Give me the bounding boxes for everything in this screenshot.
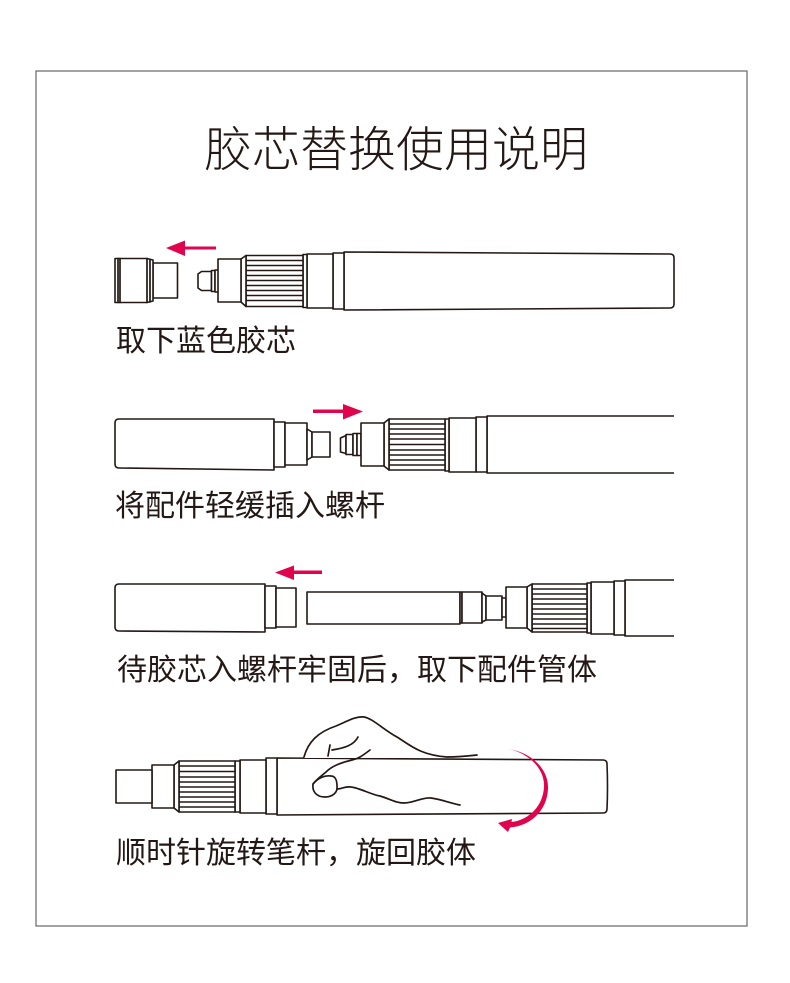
knurled grip: [389, 424, 445, 465]
hand: [304, 717, 477, 805]
step 1 label: 取下蓝色胶芯: [116, 325, 296, 358]
pen assembled: [116, 758, 608, 815]
knurled grip: [246, 260, 303, 300]
screw nozzle: [340, 434, 361, 456]
arrow: rotate clockwise: [498, 749, 548, 832]
knurled grip: [179, 766, 235, 807]
knurled grip: [532, 589, 587, 628]
cartridge: [307, 592, 506, 624]
fitting tube: [115, 584, 296, 632]
outer frame: [36, 71, 747, 926]
arrow: pull cap left: [166, 240, 216, 256]
pen body: [361, 416, 674, 473]
fitting tube: [115, 419, 330, 470]
arrow: pull tube left: [275, 566, 322, 580]
arrow: insert right: [313, 404, 363, 420]
step 2: [115, 404, 674, 523]
step 1: [115, 240, 674, 358]
screw nozzle: [198, 270, 219, 292]
step 2 label: 将配件轻缓插入螺杆: [115, 490, 385, 523]
title: 胶芯替换使用说明: [204, 124, 588, 177]
pen body: [506, 580, 674, 636]
step 3: [115, 566, 674, 687]
pen body: [218, 252, 674, 310]
step 4 label: 顺时针旋转笔杆，旋回胶体: [116, 837, 476, 870]
step 3 label: 待胶芯入螺杆牢固后，取下配件管体: [117, 654, 597, 687]
removed cap: [115, 258, 178, 302]
step 4: [116, 717, 608, 870]
